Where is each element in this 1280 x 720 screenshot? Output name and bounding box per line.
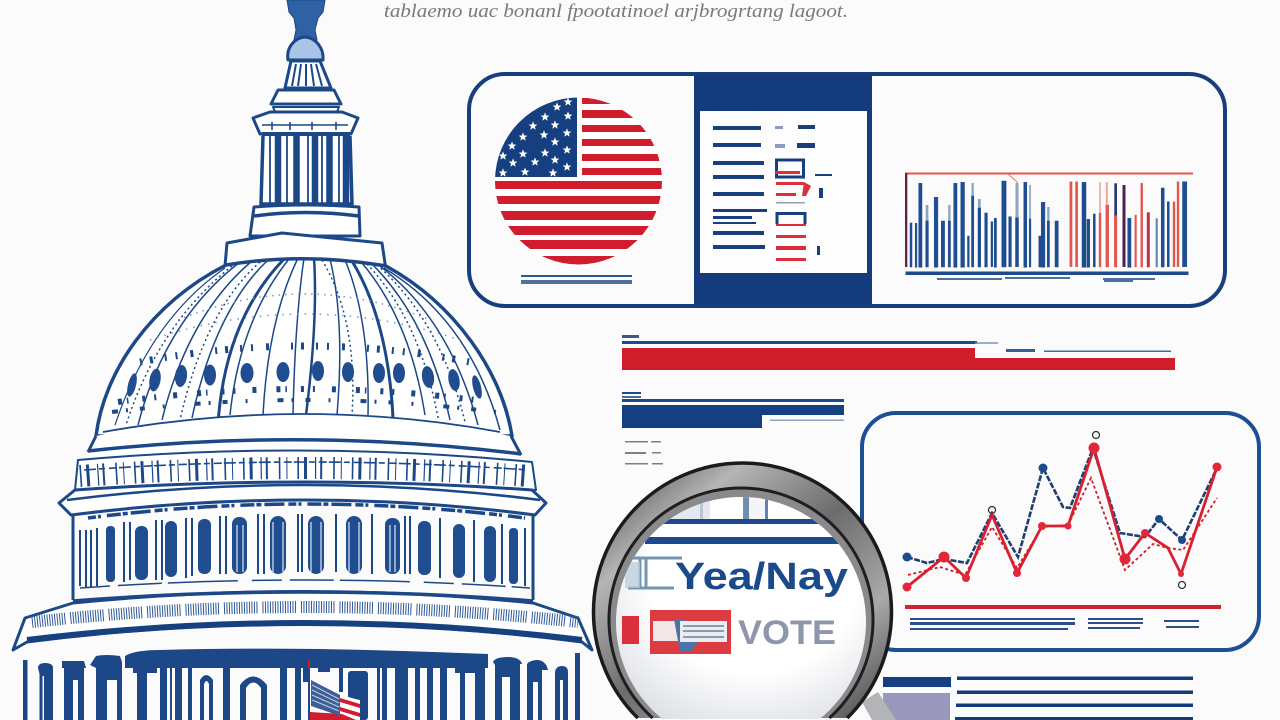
circular US flag	[495, 98, 662, 264]
chart baseline	[905, 605, 1221, 609]
magnifying glass	[593, 463, 896, 720]
flanking walls	[23, 660, 28, 720]
handle	[862, 692, 896, 720]
red ballot card	[650, 610, 731, 654]
ring markers	[988, 432, 1186, 588]
drum with windows	[73, 504, 533, 600]
lantern knob	[288, 37, 323, 60]
navy dashed series	[902, 448, 1217, 563]
frieze band	[75, 450, 536, 490]
red swatch	[622, 616, 639, 644]
upper ledge	[59, 482, 546, 515]
caption text: tablaemo uac bonanl fpootatinoel arjbrogrtang lagoot.	[384, 1, 848, 22]
tholos columns	[261, 136, 352, 204]
dome oval windows	[125, 361, 484, 400]
panel: line chart	[862, 413, 1259, 650]
VOTE label: VOTE	[738, 614, 836, 652]
red series	[902, 442, 1222, 592]
navy centre column	[694, 74, 872, 306]
lower entablature	[13, 592, 592, 650]
text block with swatch, bottom right	[883, 676, 1193, 720]
panel: flag, list and bar chart	[469, 74, 1225, 306]
tholos cornice	[253, 112, 358, 134]
dome outline	[96, 259, 512, 436]
lower colonnade	[23, 649, 580, 720]
dome ribs	[115, 258, 500, 430]
capitol building illustration	[13, 0, 592, 720]
bar chart	[905, 172, 1193, 281]
drum windows	[106, 516, 518, 584]
dome foot band	[86, 414, 523, 456]
lantern neck with flutes	[271, 61, 341, 112]
faded box icon	[628, 558, 682, 588]
navy progress bar group	[622, 392, 844, 464]
rim	[593, 463, 891, 718]
colonnade band	[125, 649, 488, 668]
red progress bar group	[622, 335, 1175, 370]
dome drum step	[225, 233, 386, 270]
list card	[700, 111, 867, 273]
small flag on building	[308, 660, 360, 720]
lens contents	[622, 497, 848, 654]
flag caption lines	[521, 275, 632, 284]
Yea/Nay label: Yea/Nay	[675, 556, 848, 598]
chart footer lines	[910, 618, 1199, 630]
thin dotted series	[908, 478, 1217, 575]
lens	[616, 497, 866, 719]
statue on top of dome	[287, 0, 325, 40]
dome window specks	[140, 346, 470, 362]
lantern base rings	[250, 205, 360, 236]
